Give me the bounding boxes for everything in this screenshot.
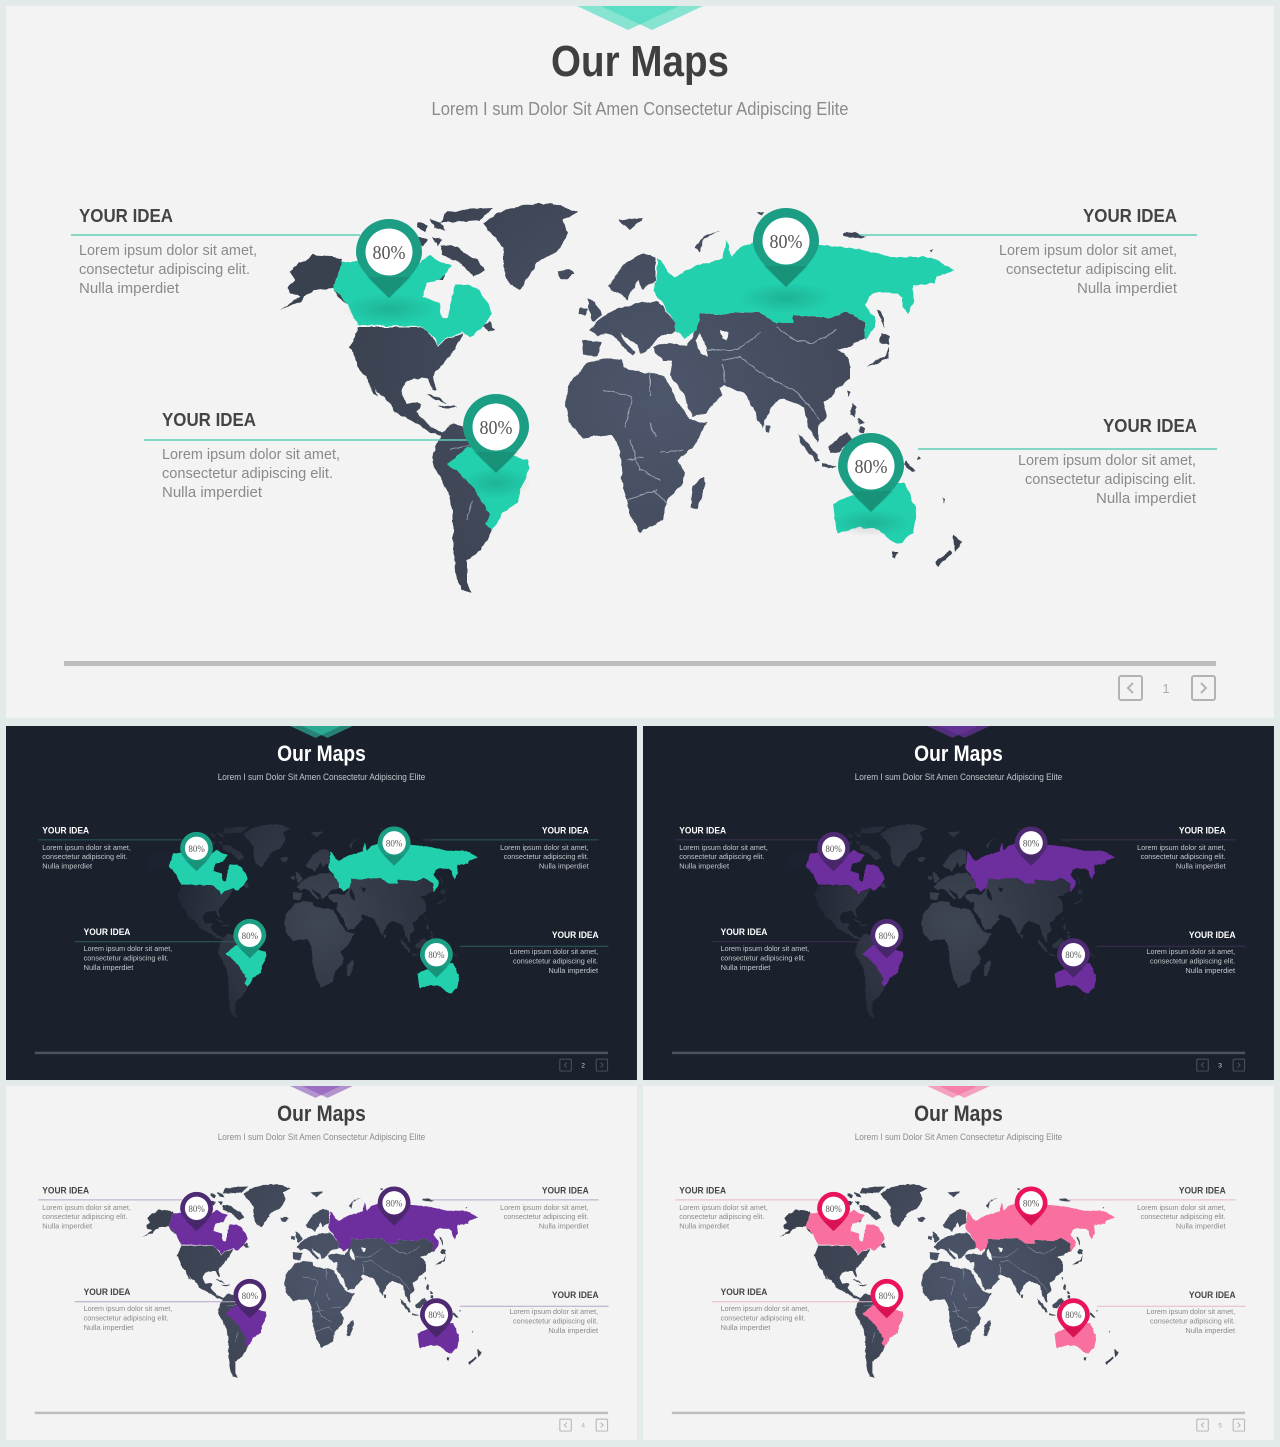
text block: top left [79,206,257,297]
text blocks: Nulla imperdiet [721,1323,771,1332]
text block: top right: Nulla imperdiet [1077,280,1178,297]
pagination: 5 [1218,1423,1222,1430]
pin: Canada: 80% [372,242,406,264]
map pins: 80% [879,931,895,942]
text blocks: consectetur adipiscing elit. [42,1212,127,1221]
map pins: 80% [1023,838,1039,849]
text blocks: Lorem ipsum dolor sit amet, [500,843,589,852]
text block: lower left: consectetur adipiscing elit. [162,465,333,482]
map pins: 80% [825,844,842,855]
text blocks: Nulla imperdiet [679,862,730,871]
map pins: 80% [386,838,402,849]
map pins: 80% [386,1198,402,1209]
text block: lower right: Nulla imperdiet [1096,490,1197,507]
slide 4: light purple [6,1086,637,1440]
text blocks: Nulla imperdiet [84,1323,134,1332]
header ribbon [927,726,990,738]
pagination [560,1419,608,1431]
header ribbon [290,726,353,738]
subtitle: Lorem I sum Dolor Sit Amen Consectetur Adipiscing Elite [855,772,1062,782]
title: Our Maps [277,1101,366,1126]
text blocks: Nulla imperdiet [679,1222,730,1231]
text blocks: Lorem ipsum dolor sit amet, [510,947,598,956]
text blocks [679,1185,1236,1335]
callout lines [675,1200,1246,1306]
text blocks: Nulla imperdiet [42,1222,93,1231]
text blocks: YOUR IDEA [679,1185,727,1195]
highlighted countries [169,842,478,993]
map pins [180,1186,453,1338]
text block: top left: YOUR IDEA [79,206,173,226]
text block: lower right: consectetur adipiscing elit. [1025,471,1196,488]
map pins: 80% [825,1204,842,1215]
text blocks: YOUR IDEA [84,1287,131,1297]
title: Our Maps [551,37,729,86]
subtitle: Lorem I sum Dolor Sit Amen Consectetur Adipiscing Elite [218,1132,425,1142]
world map [779,1184,1119,1378]
map pins [817,1186,1090,1338]
pagination [1197,1059,1245,1071]
callout lines [38,1200,609,1306]
callout lines [38,840,609,946]
slide 3: dark purple [643,726,1274,1080]
highlighted countries [806,842,1115,993]
pagination: 4 [581,1423,585,1430]
text block: lower right [1018,416,1197,507]
pagination [560,1059,608,1071]
text blocks [42,825,599,975]
text blocks: consectetur adipiscing elit. [513,1317,598,1326]
slide 1: light teal [6,6,1274,718]
text blocks: Lorem ipsum dolor sit amet, [500,1203,589,1212]
text blocks: consectetur adipiscing elit. [721,954,806,963]
pagination: 3 [1218,1063,1222,1070]
world map [779,824,1119,1018]
text blocks: YOUR IDEA [1189,930,1236,940]
text blocks: YOUR IDEA [679,825,727,835]
text blocks: Lorem ipsum dolor sit amet, [84,1304,172,1313]
text blocks: Lorem ipsum dolor sit amet, [1137,843,1226,852]
text blocks: Nulla imperdiet [548,1326,599,1335]
footer rule [64,661,1216,666]
text block: top left: Nulla imperdiet [79,280,180,297]
pagination [1197,1419,1245,1431]
map pins: 80% [428,950,445,961]
pin: Russia: 80% [770,231,802,253]
text blocks: YOUR IDEA [542,825,589,835]
text blocks: Nulla imperdiet [1185,1326,1236,1335]
map pins: 80% [1065,1310,1082,1321]
map pins [817,826,1090,978]
text block: top left: consectetur adipiscing elit. [79,261,250,278]
text blocks [679,825,1236,975]
text blocks: YOUR IDEA [1179,1185,1226,1195]
text blocks: YOUR IDEA [542,1185,589,1195]
text blocks [42,1185,599,1335]
text blocks: Nulla imperdiet [1176,862,1227,871]
title: Our Maps [914,1101,1003,1126]
map pins: 80% [428,1310,445,1321]
pin: Brazil [463,394,529,473]
text blocks: Lorem ipsum dolor sit amet, [42,1203,131,1212]
text block: lower right: YOUR IDEA [1103,416,1197,436]
text blocks: consectetur adipiscing elit. [1150,957,1235,966]
text blocks: Lorem ipsum dolor sit amet, [679,1203,768,1212]
text blocks: YOUR IDEA [1179,825,1226,835]
footer rule [672,1052,1245,1054]
text blocks: consectetur adipiscing elit. [1150,1317,1235,1326]
subtitle: Lorem I sum Dolor Sit Amen Consectetur Adipiscing Elite [218,772,425,782]
text blocks: consectetur adipiscing elit. [504,852,589,861]
footer rule [35,1412,608,1414]
header ribbon [577,6,703,30]
text blocks: Nulla imperdiet [42,862,93,871]
text blocks: Nulla imperdiet [721,963,771,972]
slide 5: light pink [643,1086,1274,1440]
text blocks: YOUR IDEA [552,1290,599,1300]
pin shadows [341,282,911,537]
text block: top right: YOUR IDEA [1083,206,1177,226]
text blocks: Lorem ipsum dolor sit amet, [42,843,131,852]
pagination: 2 [581,1063,585,1070]
text blocks: Lorem ipsum dolor sit amet, [84,944,172,953]
text blocks: Nulla imperdiet [539,862,590,871]
text blocks: consectetur adipiscing elit. [504,1212,589,1221]
text blocks: consectetur adipiscing elit. [84,1314,169,1323]
text blocks: YOUR IDEA [84,927,131,937]
header ribbon [290,1086,353,1098]
text blocks: Lorem ipsum dolor sit amet, [721,944,809,953]
map pins: 80% [1065,950,1082,961]
title: Our Maps [914,741,1003,766]
map pins: 80% [188,844,205,855]
text block: lower left: YOUR IDEA [162,410,256,430]
text block: top left: Lorem ipsum dolor sit amet, [79,242,257,259]
text blocks: Lorem ipsum dolor sit amet, [721,1304,809,1313]
pagination: 1 [1162,681,1170,696]
text blocks: Lorem ipsum dolor sit amet, [679,843,768,852]
text block: top right: Lorem ipsum dolor sit amet, [999,242,1177,259]
map pins: 80% [879,1291,895,1302]
text blocks: Lorem ipsum dolor sit amet, [1147,947,1235,956]
title: Our Maps [277,741,366,766]
map pins: 80% [242,931,258,942]
pin: Canada [356,219,422,298]
callout lines [675,840,1246,946]
pin: Australia [838,433,904,512]
map pins: 80% [242,1291,258,1302]
highlighted countries [806,1202,1115,1353]
map pins: 80% [1023,1198,1039,1209]
subtitle: Lorem I sum Dolor Sit Amen Consectetur Adipiscing Elite [432,99,848,119]
text blocks: YOUR IDEA [552,930,599,940]
text blocks: consectetur adipiscing elit. [1141,1212,1226,1221]
text blocks: Lorem ipsum dolor sit amet, [1147,1307,1235,1316]
text blocks: consectetur adipiscing elit. [679,1212,764,1221]
text blocks: Nulla imperdiet [1185,966,1236,975]
header ribbon [927,1086,990,1098]
map pins: 80% [188,1204,205,1215]
footer rule [672,1412,1245,1414]
text block: lower right: Lorem ipsum dolor sit amet, [1018,452,1196,469]
text blocks: consectetur adipiscing elit. [679,852,764,861]
pin: Russia [753,208,819,287]
world map [142,824,482,1018]
text block: lower left [162,410,340,501]
text blocks: YOUR IDEA [721,927,768,937]
text blocks: Nulla imperdiet [1176,1222,1227,1231]
text block: lower left: Lorem ipsum dolor sit amet, [162,446,340,463]
text blocks: Nulla imperdiet [84,963,134,972]
text block: top right [999,206,1178,297]
text blocks: YOUR IDEA [42,825,90,835]
world map [280,203,962,593]
highlighted countries [333,240,955,543]
pin: Australia: 80% [854,456,888,478]
map pins [180,826,453,978]
text block: lower left: Nulla imperdiet [162,484,263,501]
text blocks: Lorem ipsum dolor sit amet, [510,1307,598,1316]
text blocks: Lorem ipsum dolor sit amet, [1137,1203,1226,1212]
text blocks: consectetur adipiscing elit. [721,1314,806,1323]
text blocks: consectetur adipiscing elit. [42,852,127,861]
text blocks: YOUR IDEA [1189,1290,1236,1300]
pagination [1119,676,1215,700]
text blocks: consectetur adipiscing elit. [513,957,598,966]
text block: top right: consectetur adipiscing elit. [1006,261,1177,278]
footer rule [35,1052,608,1054]
world map [142,1184,482,1378]
pin: Brazil: 80% [480,417,512,439]
callout lines [71,235,1217,449]
slide 2: dark teal [6,726,637,1080]
subtitle: Lorem I sum Dolor Sit Amen Consectetur Adipiscing Elite [855,1132,1062,1142]
text blocks: YOUR IDEA [42,1185,90,1195]
text blocks: Nulla imperdiet [539,1222,590,1231]
text blocks: consectetur adipiscing elit. [84,954,169,963]
text blocks: Nulla imperdiet [548,966,599,975]
text blocks: YOUR IDEA [721,1287,768,1297]
highlighted countries [169,1202,478,1353]
text blocks: consectetur adipiscing elit. [1141,852,1226,861]
